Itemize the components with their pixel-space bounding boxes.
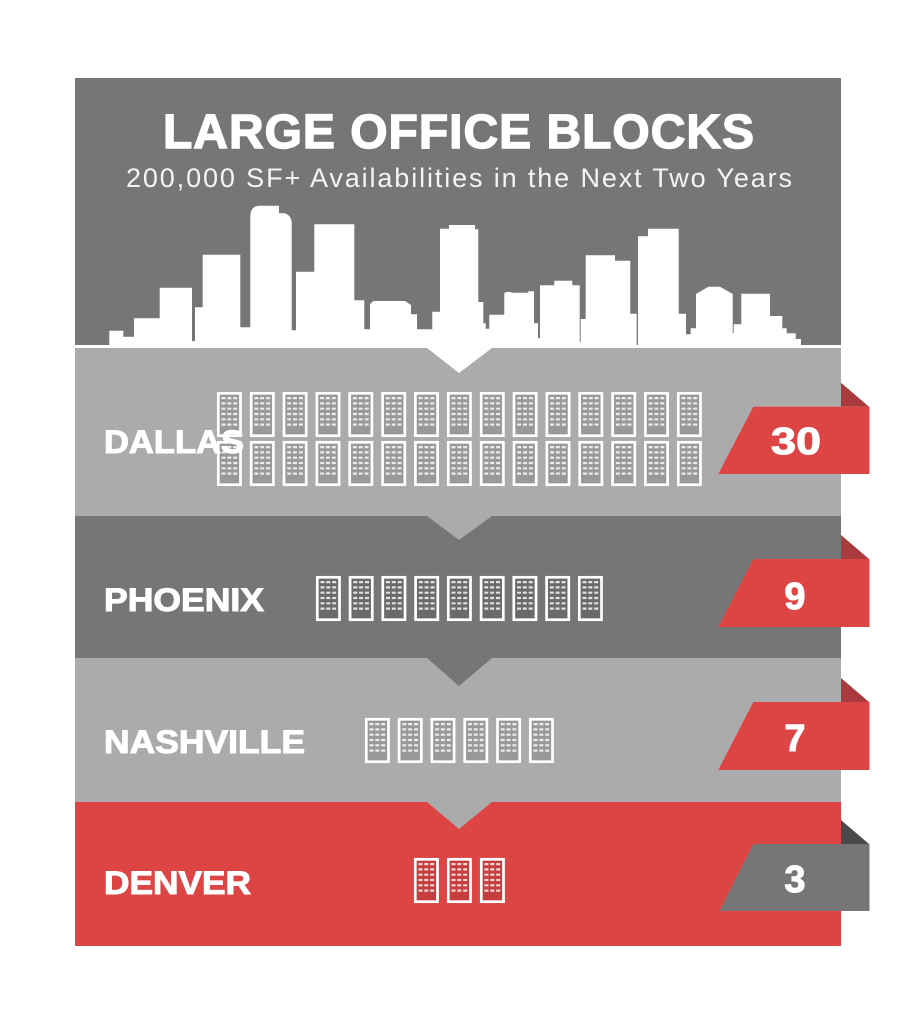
ribbon: Phoenix 9 [718,535,870,627]
panel: Nashville [75,658,841,802]
panel: Denver [75,802,841,946]
ribbon: Dallas 30: 30 [771,421,821,463]
arrow: Dallas pointer [427,516,492,540]
ribbon: Nashville 7 [718,678,870,770]
ribbon: Phoenix 9: 9 [784,576,806,618]
ribbon: Denver 3 [720,820,870,911]
label: Dallas: DALLAS [104,424,244,460]
building icons: Nashville 7 [366,719,552,762]
subtitle: 200,000 SF+ Availabilities in the Next Two Years [126,163,792,193]
arrow: Phoenix pointer [427,658,492,686]
ribbon: Dallas 30 [718,383,870,474]
panel: Phoenix [75,516,841,658]
ribbon: Nashville 7: 7 [784,718,806,760]
building icons: Denver 3 [415,859,504,902]
arrow: header pointer [427,348,492,373]
label: Nashville: NASHVILLE [104,724,305,760]
panel: header [75,78,841,349]
label: Phoenix: PHOENIX [104,582,265,618]
arrow: Nashville pointer [427,802,492,829]
label: Denver: DENVER [104,865,251,901]
title: LARGE OFFICE BLOCKS [163,106,755,159]
ribbon: Denver 3: 3 [784,859,806,901]
panel: Dallas [75,348,841,516]
building icons: Dallas 30 [218,393,701,485]
skyline [109,206,801,349]
building icons: Phoenix 9 [317,577,602,620]
